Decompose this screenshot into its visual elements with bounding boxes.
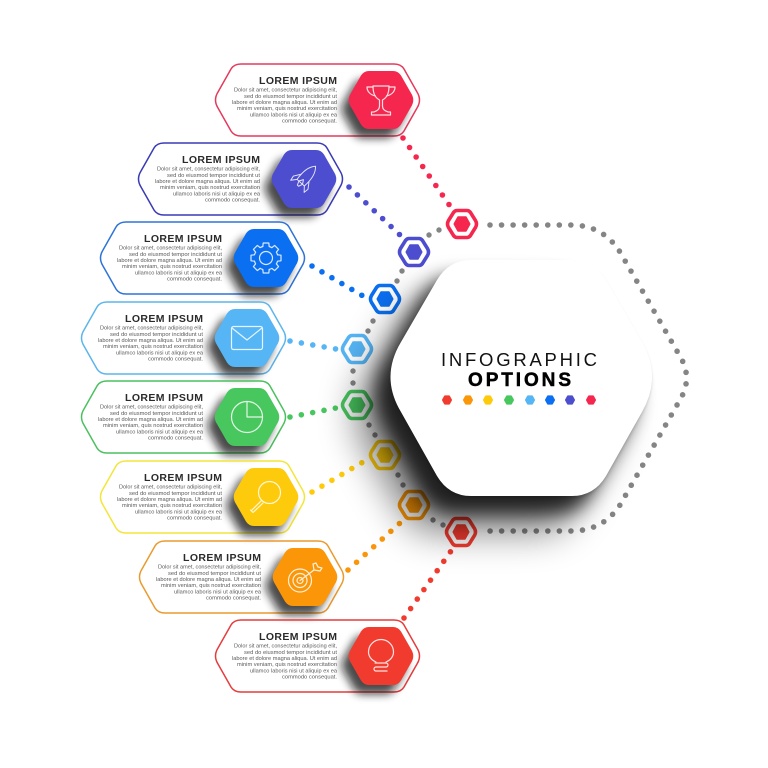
text block: ullamco laboris nisi ut aliquip ex ea bbox=[250, 112, 337, 118]
connector: crimson bbox=[403, 138, 450, 206]
text block bbox=[232, 75, 338, 125]
icon: pie chart bbox=[232, 402, 262, 432]
text block: Dolor sit amet, consectetur adipiscing elit, bbox=[157, 166, 260, 172]
text block: sed do eiusmod tempor incididunt ut bbox=[244, 650, 338, 656]
icon: gear bbox=[251, 243, 281, 273]
panel: option 8 red bbox=[216, 620, 420, 694]
text block: ullamco laboris nisi ut aliquip ex ea bbox=[116, 429, 203, 435]
text block: LOREM IPSUM bbox=[259, 75, 337, 87]
panel: option 4 light blue bbox=[82, 302, 286, 376]
text block: commodo consequat. bbox=[167, 277, 222, 283]
panel: option 2 indigo bbox=[138, 143, 342, 217]
text block: minim veniam, quis nostrud exercitation bbox=[237, 662, 337, 668]
node: light blue bbox=[342, 336, 372, 362]
node: yellow bbox=[370, 442, 400, 468]
central hexagon soft edge bbox=[390, 262, 652, 498]
text block: commodo consequat. bbox=[205, 198, 260, 204]
text block: LOREM IPSUM bbox=[125, 313, 203, 325]
text block: Dolor sit amet, consectetur adipiscing elit, bbox=[234, 88, 337, 94]
text block bbox=[155, 154, 261, 204]
text block: commodo consequat. bbox=[282, 675, 337, 681]
text block: Dolor sit amet, consectetur adipiscing elit, bbox=[119, 484, 222, 490]
text block: ullamco laboris nisi ut aliquip ex ea bbox=[135, 270, 222, 276]
heading: infographic: INFOGRAPHIC bbox=[441, 349, 597, 370]
panel: option 3 blue bbox=[100, 222, 304, 296]
icon: target bbox=[288, 563, 322, 592]
text block: sed do eiusmod tempor incididunt ut bbox=[168, 571, 262, 577]
node: green bbox=[342, 392, 372, 418]
text block: ullamco laboris nisi ut aliquip ex ea bbox=[116, 350, 203, 356]
text block: sed do eiusmod tempor incididunt ut bbox=[167, 173, 261, 179]
text block: sed do eiusmod tempor incididunt ut bbox=[129, 252, 223, 258]
text block: LOREM IPSUM bbox=[144, 472, 222, 484]
text block: Dolor sit amet, consectetur adipiscing elit, bbox=[119, 246, 222, 252]
text block: labore et dolore magna aliqua. Ut enim ad bbox=[156, 577, 261, 583]
text block: sed do eiusmod tempor incididunt ut bbox=[110, 332, 204, 338]
text block: labore et dolore magna aliqua. Ut enim ad bbox=[232, 100, 337, 106]
central hexagon close shadow bbox=[376, 277, 637, 513]
node: red bbox=[446, 518, 476, 546]
connector: green bbox=[290, 408, 336, 417]
text block: commodo consequat. bbox=[206, 596, 261, 602]
text block: minim veniam, quis nostrud exercitation bbox=[237, 106, 337, 112]
heading: options: OPTIONS bbox=[468, 370, 571, 391]
text block: LOREM IPSUM bbox=[125, 392, 203, 404]
text block bbox=[98, 392, 204, 442]
text block: Dolor sit amet, consectetur adipiscing elit, bbox=[234, 644, 337, 650]
text block: ullamco laboris nisi ut aliquip ex ea bbox=[173, 191, 260, 197]
color dots row bbox=[443, 396, 595, 404]
text block: ullamco laboris nisi ut aliquip ex ea bbox=[174, 589, 261, 595]
panel: option 5 green bbox=[82, 381, 286, 455]
text block: minim veniam, quis nostrud exercitation bbox=[160, 185, 260, 191]
panel: option 7 orange bbox=[140, 541, 344, 615]
text block bbox=[232, 631, 338, 681]
text block: LOREM IPSUM bbox=[183, 552, 261, 564]
text block: LOREM IPSUM bbox=[259, 631, 337, 643]
text block bbox=[117, 233, 223, 283]
text block: commodo consequat. bbox=[148, 436, 203, 442]
icon: magnifier bbox=[250, 482, 280, 512]
panel: option 6 yellow bbox=[100, 461, 304, 535]
gray dotted hexagon ring bbox=[486, 225, 686, 531]
text block: labore et dolore magna aliqua. Ut enim ad bbox=[155, 179, 260, 185]
node: crimson bbox=[448, 210, 476, 238]
panel: option 1 crimson bbox=[216, 64, 420, 138]
text block: minim veniam, quis nostrud exercitation bbox=[122, 503, 222, 509]
text block: Dolor sit amet, consectetur adipiscing elit, bbox=[158, 564, 261, 570]
text block: labore et dolore magna aliqua. Ut enim ad bbox=[232, 656, 337, 662]
text block: labore et dolore magna aliqua. Ut enim ad bbox=[117, 258, 222, 264]
text block: minim veniam, quis nostrud exercitation bbox=[122, 264, 222, 270]
text block: sed do eiusmod tempor incididunt ut bbox=[244, 94, 338, 100]
text block bbox=[98, 313, 204, 363]
text block: ullamco laboris nisi ut aliquip ex ea bbox=[135, 509, 222, 515]
connector: indigo bbox=[349, 187, 400, 235]
icon: envelope bbox=[232, 326, 262, 350]
icon: rocket bbox=[290, 160, 323, 193]
node: orange bbox=[400, 492, 428, 518]
text block: minim veniam, quis nostrud exercitation bbox=[161, 583, 261, 589]
central white hexagon bbox=[390, 260, 652, 496]
connector: blue bbox=[312, 266, 363, 296]
text block: sed do eiusmod tempor incididunt ut bbox=[129, 491, 223, 497]
node: indigo bbox=[400, 238, 428, 266]
central hexagon wide shadow bbox=[356, 296, 618, 532]
text block: Dolor sit amet, consectetur adipiscing elit, bbox=[100, 326, 203, 332]
text block: commodo consequat. bbox=[167, 516, 222, 522]
text block: commodo consequat. bbox=[148, 357, 203, 363]
text block: ullamco laboris nisi ut aliquip ex ea bbox=[250, 668, 337, 674]
icon: light bulb bbox=[368, 640, 394, 671]
text block: labore et dolore magna aliqua. Ut enim ad bbox=[98, 417, 203, 423]
text block: labore et dolore magna aliqua. Ut enim ad bbox=[98, 338, 203, 344]
text block: LOREM IPSUM bbox=[144, 233, 222, 245]
connector: red bbox=[404, 551, 451, 618]
text block: labore et dolore magna aliqua. Ut enim ad bbox=[117, 497, 222, 503]
connector: light blue bbox=[290, 341, 336, 349]
text block bbox=[156, 552, 262, 602]
connector: yellow bbox=[312, 462, 363, 492]
node: blue bbox=[370, 286, 400, 312]
text block: minim veniam, quis nostrud exercitation bbox=[103, 423, 203, 429]
text block bbox=[117, 472, 223, 522]
text block: commodo consequat. bbox=[282, 119, 337, 125]
text block: minim veniam, quis nostrud exercitation bbox=[103, 344, 203, 350]
text block: sed do eiusmod tempor incididunt ut bbox=[110, 411, 204, 417]
connector: orange bbox=[348, 523, 400, 570]
icon: trophy bbox=[367, 86, 395, 115]
text block: Dolor sit amet, consectetur adipiscing elit, bbox=[100, 404, 203, 410]
gray connector dots between nodes bbox=[350, 227, 446, 528]
text block: LOREM IPSUM bbox=[182, 154, 260, 166]
